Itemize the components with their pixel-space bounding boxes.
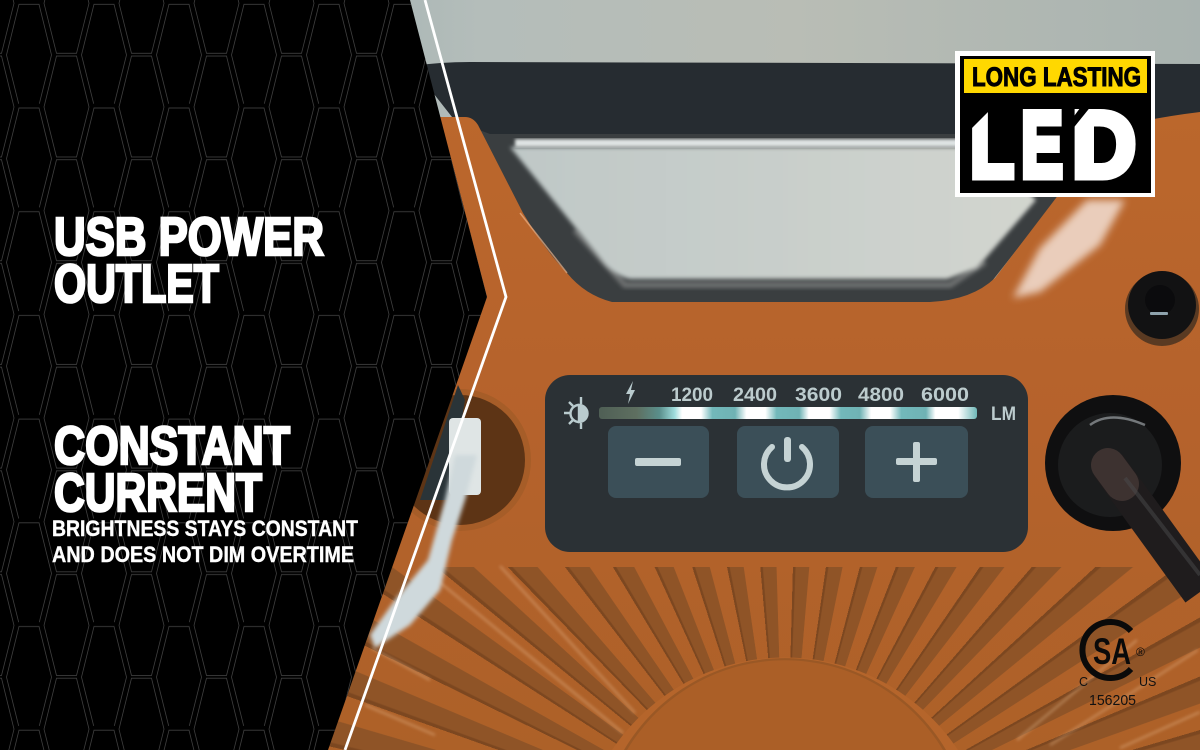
certification mark: CSA (1079, 622, 1156, 709)
heading: USB power outlet: USB POWER (54, 207, 324, 267)
certification mark: CSA: C (1079, 675, 1088, 689)
description text: AND DOES NOT DIM OVERTIME (52, 542, 354, 567)
lumen scale labels: 6000 (921, 385, 969, 406)
bolt socket (1125, 271, 1199, 346)
certification mark: CSA: ® (1136, 645, 1145, 659)
icon: brightness sun (564, 397, 588, 429)
badge: long lasting LED: L (970, 92, 1014, 197)
vent rib highlights (365, 566, 1200, 748)
lumen scale labels: 4800 (858, 385, 904, 406)
power cord grommet (1045, 395, 1200, 592)
heading: USB power outlet (54, 207, 324, 314)
lumen scale labels: LM (991, 404, 1016, 425)
plus button (865, 426, 968, 498)
lumen scale labels: 1200 (671, 385, 713, 406)
lumen scale labels: 2400 (733, 385, 777, 406)
badge: long lasting LED: D (1072, 92, 1136, 197)
brightness light bar (599, 407, 977, 419)
chevron divider line (345, 0, 506, 750)
control panel (545, 375, 1028, 552)
badge: long lasting LED: LONG LASTING (972, 62, 1141, 92)
heading: USB power outlet: OUTLET (54, 254, 219, 314)
light window opening (470, 125, 1060, 306)
lumen scale labels: 3600 (795, 385, 842, 406)
heading: constant current: CONSTANT (54, 416, 290, 476)
USB port recess with plug (370, 385, 531, 648)
icon: bolt (626, 381, 635, 404)
certification mark: CSA: 156205 (1089, 692, 1136, 709)
product photo: work light control area (328, 0, 1200, 750)
heading: constant current (54, 416, 290, 523)
vent hub (612, 657, 958, 750)
description text: BRIGHTNESS STAYS CONSTANT (52, 516, 358, 541)
certification mark: CSA: US (1139, 675, 1156, 689)
carrying handle (412, 62, 1200, 134)
radial vent ribs (329, 567, 1200, 750)
lumen scale labels (671, 385, 1016, 425)
minus button (608, 426, 709, 498)
orange housing (300, 112, 1200, 750)
badge: long lasting LED: E (1021, 92, 1063, 197)
description text (52, 516, 358, 567)
heading: constant current: CURRENT (54, 463, 262, 523)
power button (737, 426, 839, 498)
certification mark: CSA: SA (1093, 631, 1131, 672)
black panel with hexagon pattern (0, 0, 487, 750)
housing highlight (520, 200, 1125, 298)
badge: long lasting LED (955, 51, 1155, 197)
